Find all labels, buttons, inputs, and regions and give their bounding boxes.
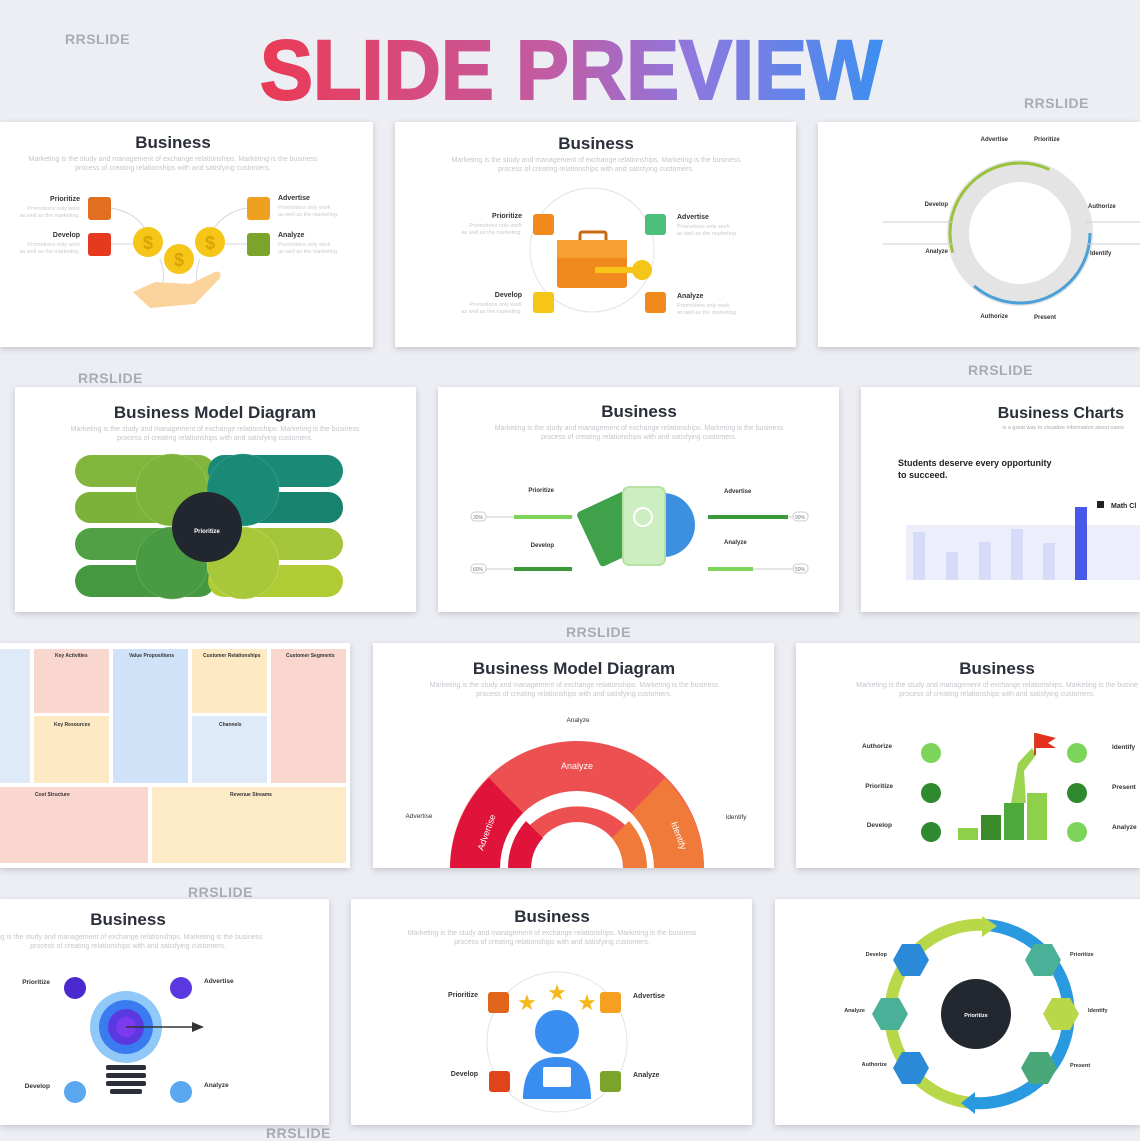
icons: [488, 992, 509, 1013]
subtitle: process of creating relationships with and satisfying customers.: [75, 165, 271, 172]
slide 8: semicircle model: Advertise: [475, 813, 498, 852]
subtitle: [452, 157, 741, 173]
slide 7: business model canvas: [0, 643, 350, 868]
center: [172, 492, 242, 562]
slide 12: hexagon cycle: Present: [1070, 1063, 1090, 1069]
heading: Business: [558, 134, 634, 153]
subtitle: Marketing is the study and management of exchange relationships. Marketing is the business: [29, 156, 318, 163]
slide 12: hexagon cycle: Prioritize: [964, 1013, 988, 1019]
slide 5: business bars: Develop: [531, 543, 554, 549]
slide 3: ring diagram: Develop: [925, 202, 948, 208]
slide 6: business charts: is a great way to visualize information about users: [1002, 425, 1124, 431]
slide 1: business hand coins: as well as the marketing.: [19, 213, 80, 219]
slide 1: business hand coins: Promotions only work: [27, 242, 80, 248]
watermark: RRSLIDE: [266, 1125, 331, 1141]
slide 5: business bars: 30%: [473, 515, 484, 521]
arcs: [450, 741, 704, 868]
stars: ★: [547, 980, 567, 1005]
slide 8: semicircle model: Identify: [669, 820, 689, 851]
subtitle: Marketing is the study and management of exchange relationships. Marketing is the busine: [856, 682, 1138, 689]
heading: Business: [90, 910, 166, 929]
slide 6: business charts: Math Cl: [1111, 503, 1136, 510]
slide 3: ring diagram: Advertise: [981, 137, 1009, 143]
slide 9: business steps: Present: [1112, 784, 1137, 791]
slide 2: briefcase: Advertise: [677, 214, 709, 221]
labels: [50, 195, 310, 239]
slide 12: hexagon cycle: Identify: [1088, 1008, 1108, 1014]
slide 1: business hand coins: Promotions only work: [278, 242, 331, 248]
slide 7: business model canvas: Key Activities: [55, 653, 88, 659]
text block: [898, 458, 1052, 480]
slide 8: semicircle model: Analyze: [566, 717, 590, 724]
slide 1: business hand coins: Promotions only work: [27, 206, 80, 212]
slide 11: person stars: Advertise: [633, 993, 665, 1000]
slide 10: target bulb: Prioritize: [22, 979, 50, 986]
slide 2: briefcase: Promotions only work: [677, 224, 730, 230]
slide 2: briefcase: as well as the marketing.: [461, 309, 522, 315]
slide 8: semicircle model: Analyze: [561, 761, 593, 771]
slide 2: briefcase: Promotions only work: [469, 223, 522, 229]
bars: [478, 517, 800, 569]
slide 9: business steps: Analyze: [1112, 824, 1137, 831]
watermark: RRSLIDE: [65, 31, 130, 47]
subtitle: [408, 930, 697, 946]
slide 1: business hand coins: $: [205, 233, 215, 253]
stars: ★: [517, 990, 537, 1015]
slide 2: briefcase: as well as the marketing.: [677, 310, 738, 316]
slide 2: briefcase: as well as the marketing.: [461, 230, 522, 236]
slide 1: business hand coins: [0, 122, 373, 347]
slide 2: briefcase: Promotions only work: [469, 302, 522, 308]
labels: Analyze: [278, 232, 305, 239]
slide 11: person stars: Develop: [451, 1071, 478, 1078]
slide 3: ring diagram: [818, 122, 1140, 347]
heading: Business Model Diagram: [473, 659, 675, 678]
slide 12: hexagon cycle: Prioritize: [1070, 952, 1094, 958]
stars: [517, 980, 597, 1015]
slide 10: target bulb: Analyze: [204, 1082, 229, 1089]
slide 8: semicircle model: [373, 643, 774, 868]
slide 1: business hand coins: $: [143, 233, 153, 253]
slide 11: person stars: Prioritize: [448, 992, 478, 999]
slide 3: ring diagram: Authorize: [1088, 204, 1116, 210]
slide 3: ring diagram: Analyze: [925, 249, 949, 255]
slide 5: business bars: 60%: [473, 567, 484, 573]
watermark: RRSLIDE: [968, 362, 1033, 378]
icons: [921, 743, 1087, 842]
slide 2: briefcase: as well as the marketing.: [677, 231, 738, 237]
subtitle: [71, 426, 360, 442]
slide 5: business bars: Advertise: [724, 489, 752, 495]
slide 4: business model diagram green: Prioritize: [194, 529, 220, 535]
slide 9: business steps: Develop: [867, 822, 892, 829]
slide 1: business hand coins: as well as the marketing.: [278, 212, 339, 218]
slide 6: business charts: [861, 387, 1140, 612]
watermark: RRSLIDE: [1024, 95, 1089, 111]
coins: [133, 227, 225, 274]
slide 5: business bars: 50%: [795, 567, 806, 573]
slide 7: business model canvas: Customer Segments: [286, 653, 335, 659]
subtitle: process of creating relationships with and satisfying customers.: [30, 943, 226, 950]
subtitle: process of creating relationships with and satisfying customers.: [498, 166, 694, 173]
briefcase: [580, 232, 606, 242]
heading: Business Model Diagram: [114, 403, 316, 422]
subtitle: Marketing is the study and management of exchange relationships. Marketing is the business: [408, 930, 697, 937]
slide 5: business bars: 90%: [795, 515, 806, 521]
slide 1: business hand coins: Promotions only work: [278, 205, 331, 211]
subtitle: [856, 682, 1138, 698]
slide 5: business bars: Prioritize: [528, 488, 555, 494]
subtitle: [430, 682, 719, 698]
slide 7: business model canvas: Channels: [219, 722, 242, 728]
subtitle: Marketing is the study and management of exchange relationships. Marketing is the business: [452, 157, 741, 164]
slide 12: hexagon cycle: [775, 899, 1140, 1125]
slide 2: briefcase: Prioritize: [492, 213, 522, 220]
slide 12: hexagon cycle: Analyze: [844, 1008, 865, 1014]
icons: [88, 197, 111, 220]
slide 2: briefcase: Analyze: [677, 293, 704, 300]
slide 3: ring diagram: Present: [1034, 315, 1056, 321]
watermark: RRSLIDE: [566, 624, 631, 640]
hand: [133, 272, 220, 308]
subtitle: [0, 934, 263, 950]
hexagons: [872, 944, 1079, 1084]
subtitle: Marketing is the study and management of exchange relationships. Marketing is the business: [430, 682, 719, 689]
slide 8: semicircle model: Identify: [726, 814, 747, 821]
watermark: RRSLIDE: [188, 884, 253, 900]
labels: Develop: [53, 232, 80, 239]
slide 5: business bars: [438, 387, 839, 612]
slide 3: ring diagram: Prioritize: [1034, 137, 1060, 143]
text block: to succeed.: [898, 470, 948, 480]
heading: Business: [959, 659, 1035, 678]
slide 1: business hand coins: as well as the marketing.: [278, 249, 339, 255]
slide 9: business steps: Identify: [1112, 744, 1135, 751]
slide 7: business model canvas: Value Propositions: [129, 653, 174, 659]
bulb target: [90, 991, 162, 1063]
subtitle: process of creating relationships with and satisfying customers.: [454, 939, 650, 946]
slide 5: business bars: Analyze: [724, 540, 747, 546]
slide 2: briefcase: [395, 122, 796, 347]
slide 7: business model canvas: Cost Structure: [35, 792, 70, 798]
stars: ★: [577, 990, 597, 1015]
money phone globe: [631, 493, 695, 557]
subtitle: Marketing is the study and management of exchange relationships. Marketing is the business: [495, 425, 784, 432]
subtitle: process of creating relationships with and satisfying customers.: [541, 434, 737, 441]
text block: Students deserve every opportunity: [898, 458, 1052, 468]
subtitle: Marketing is the study and management of exchange relationships. Marketing is the business: [71, 426, 360, 433]
steps figure: [958, 828, 978, 840]
slide 2: briefcase: Promotions only work: [677, 303, 730, 309]
slide 11: person stars: [351, 899, 752, 1125]
slide 12: hexagon cycle: Authorize: [862, 1062, 887, 1068]
labels: Advertise: [278, 195, 310, 202]
subtitle: process of creating relationships with and satisfying customers.: [476, 691, 672, 698]
person: [535, 1010, 579, 1054]
labels: Prioritize: [50, 196, 80, 203]
heading: Business Charts: [998, 405, 1124, 422]
subtitle: ting is the study and management of exchange relationships. Marketing is the business: [0, 934, 263, 941]
slide 8: semicircle model: Advertise: [405, 813, 433, 820]
slide 4: business model diagram green: [15, 387, 416, 612]
ring: [958, 171, 1082, 295]
slide 3: ring diagram: Identify: [1090, 251, 1112, 257]
icons: [533, 214, 554, 235]
watermark: RRSLIDE: [78, 370, 143, 386]
slide 10: target bulb: Advertise: [204, 978, 234, 985]
slide 7: business model canvas: Key Resources: [54, 722, 90, 728]
slide 10: target bulb: [0, 899, 329, 1125]
slide 9: business steps: [796, 643, 1140, 868]
icons: [64, 977, 86, 999]
slide 7: business model canvas: Customer Relationships: [203, 653, 261, 659]
slide 1: business hand coins: as well as the marketing.: [19, 249, 80, 255]
slide 11: person stars: Analyze: [633, 1072, 660, 1079]
slide 7: business model canvas: Revenue Streams: [230, 792, 272, 798]
pills: [75, 454, 343, 599]
slide 9: business steps: Authorize: [862, 743, 892, 750]
subtitle: process of creating relationships with and satisfying customers.: [117, 435, 313, 442]
chart: [906, 525, 1140, 580]
subtitle: [29, 156, 318, 172]
ring: [890, 925, 986, 1103]
slide 9: business steps: Prioritize: [865, 783, 893, 790]
heading: Business: [514, 907, 590, 926]
subtitle: [495, 425, 784, 441]
slide 1: business hand coins: $: [174, 250, 184, 270]
slide 2: briefcase: Develop: [495, 292, 522, 299]
heading: Business: [135, 133, 211, 152]
canvas blocks: [0, 649, 30, 783]
heading: Business: [601, 402, 677, 421]
slide 12: hexagon cycle: Develop: [866, 952, 888, 958]
subtitle: process of creating relationships with and satisfying customers.: [899, 691, 1095, 698]
slide 3: ring diagram: Authorize: [980, 314, 1009, 320]
slide 10: target bulb: Develop: [25, 1083, 50, 1090]
